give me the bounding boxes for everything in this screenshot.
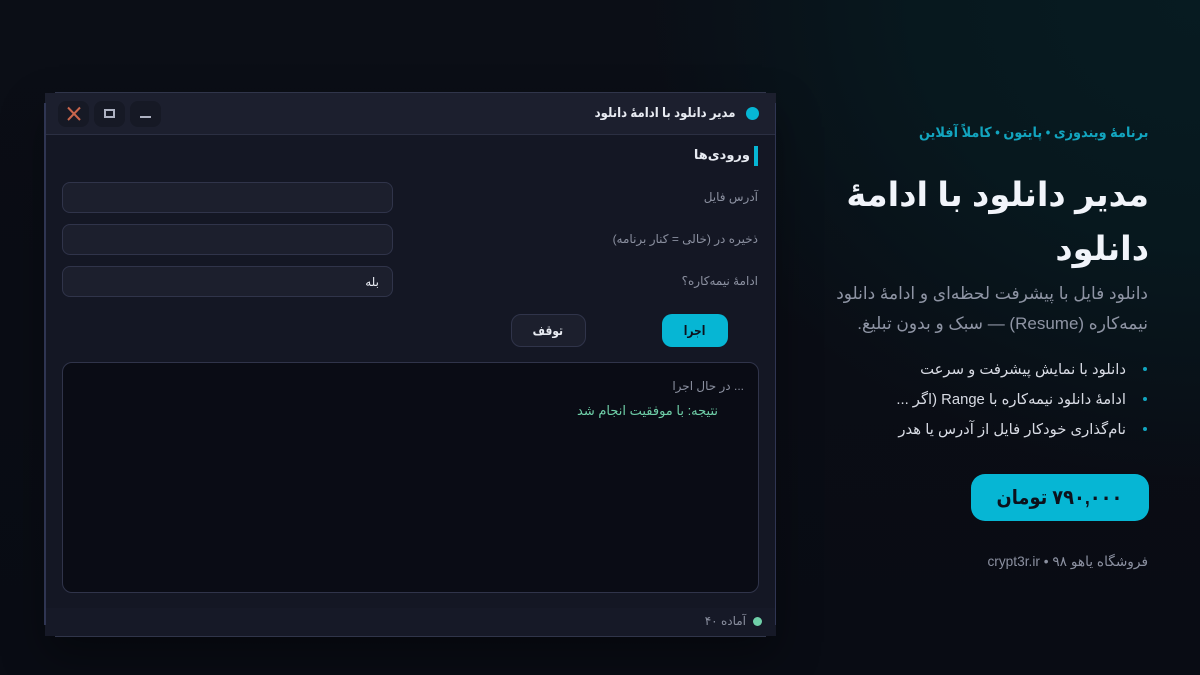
log line: result: نتیجه: با موفقیت انجام شد	[577, 403, 718, 418]
feature 2: ادامهٔ دانلود نیمه‌کاره با Range (اگر ...	[896, 392, 1126, 408]
button: close	[58, 101, 89, 127]
field: save location: ذخیره در (خالی = کنار برنامه)	[613, 232, 758, 246]
description	[836, 284, 1148, 333]
button: maximize	[94, 101, 125, 127]
status bar	[45, 608, 776, 636]
field: resume: بله	[365, 275, 379, 289]
title: مدیر دانلود با ادامهٔ	[846, 176, 1149, 214]
button: run	[662, 314, 728, 347]
app window	[45, 93, 776, 636]
status indicator	[753, 617, 762, 626]
feature list	[896, 362, 1147, 438]
section heading: inputs: ورودی‌ها	[694, 147, 750, 162]
button: stop: توقف	[533, 323, 563, 338]
description: دانلود فایل با پیشرفت لحظه‌ای و ادامهٔ دانلود	[836, 284, 1148, 303]
feature 3: نام‌گذاری خودکار فایل از آدرس یا هدر	[898, 422, 1126, 438]
title	[846, 176, 1149, 268]
status text: آماده ۴۰	[705, 614, 746, 628]
status dot	[746, 107, 759, 120]
price badge: ۷۹۰,۰۰۰ تومان	[996, 487, 1122, 509]
footer: فروشگاه یاهو ۹۸ • crypt3r.ir	[987, 554, 1148, 569]
field: save location	[62, 224, 758, 255]
description: نیمه‌کاره (Resume) — سبک و بدون تبلیغ.	[857, 314, 1148, 333]
eyebrow: برنامهٔ ویندوزی • پایتون • کاملاً آفلاین	[918, 124, 1148, 140]
feature 1: دانلود با نمایش پیشرفت و سرعت	[920, 362, 1126, 378]
field: file address	[62, 182, 758, 213]
title bar	[45, 93, 776, 135]
log line: running: ... در حال اجرا	[672, 379, 744, 393]
field: resume	[62, 266, 758, 297]
title: دانلود	[1055, 230, 1149, 268]
log panel	[62, 362, 759, 593]
button: stop	[511, 314, 586, 347]
window title: مدیر دانلود با ادامهٔ دانلود	[595, 105, 736, 120]
field: file address: آدرس فایل	[704, 190, 758, 204]
field: resume: ادامهٔ نیمه‌کاره؟	[682, 274, 758, 288]
button: run: اجرا	[683, 323, 705, 338]
section heading: inputs	[694, 146, 758, 166]
price badge	[971, 474, 1149, 521]
button: minimize	[130, 101, 161, 127]
